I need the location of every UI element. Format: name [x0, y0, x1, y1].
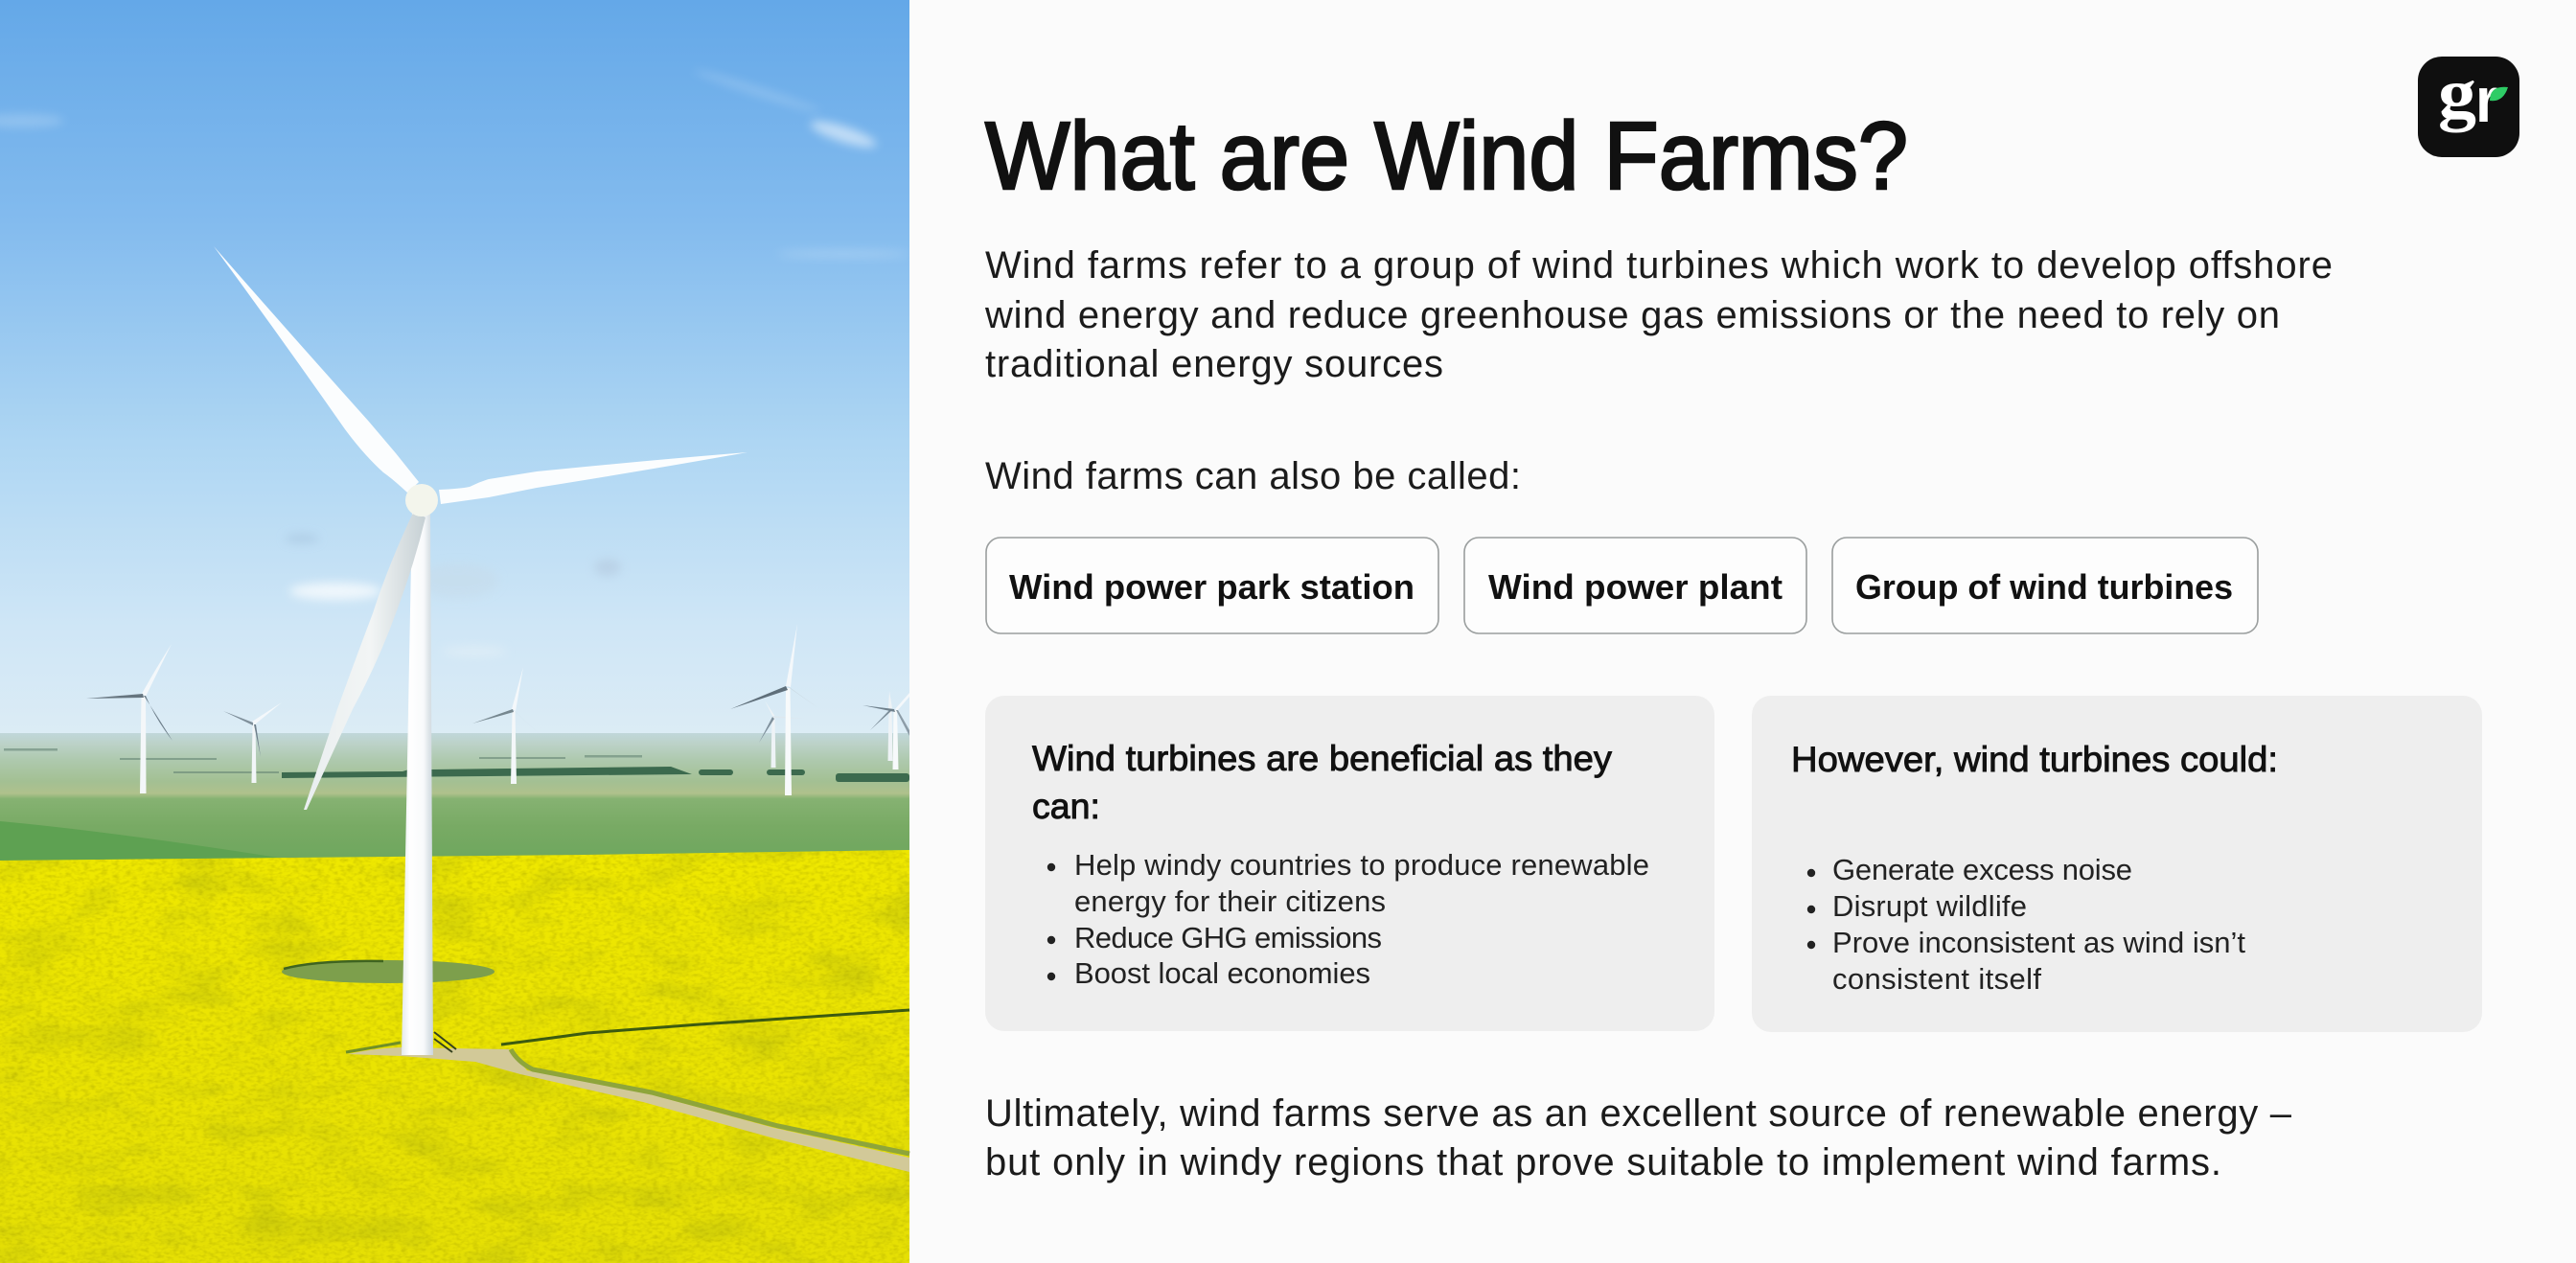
panel: drawbacks: [1752, 696, 2482, 1032]
subheading: also called: Wind farms can also be called:: [985, 455, 1521, 497]
intro paragraph: wind energy and reduce greenhouse gas emissions or the need to rely on: [984, 294, 2280, 336]
benefits heading: can:: [1032, 787, 1100, 826]
clouds: [0, 67, 910, 656]
closing paragraph: but only in windy regions that prove suitable to implement wind farms.: [985, 1141, 2221, 1183]
pad edge: [346, 1043, 401, 1052]
main tower: [402, 513, 433, 1055]
canola field: [0, 850, 909, 1263]
chip: wind power park station: Wind power park station: [1009, 567, 1414, 607]
title: What are Wind Farms?: [985, 103, 1908, 210]
benefits list: [1047, 848, 1649, 990]
small turbine 3: [472, 667, 542, 784]
photo: wind turbines in a canola field: [0, 0, 910, 1263]
intro paragraph: Wind farms refer to a group of wind turbines which work to develop offshore: [985, 244, 2333, 287]
distant field strips: [4, 748, 642, 773]
intro paragraph: [984, 244, 2333, 385]
small turbine 1: [86, 644, 172, 793]
small turbine 5: [759, 700, 804, 768]
logo: [2418, 55, 2519, 157]
panel: benefits: [985, 696, 1714, 1031]
benefits list: Reduce GHG emissions: [1074, 921, 1382, 954]
hub: [405, 484, 438, 517]
drawbacks list: Prove inconsistent as wind isn’t: [1832, 926, 2245, 959]
drawbacks list: [1807, 853, 2245, 996]
chip: wind power plant: [1464, 538, 1806, 633]
tower stairs: [434, 1032, 456, 1052]
small turbine 4: [730, 624, 818, 795]
small turbine 2: [223, 702, 282, 783]
chip: group of wind turbines: Group of wind turbines: [1855, 567, 2233, 607]
small turbine 7: [870, 691, 893, 761]
chip: wind power park station: [986, 538, 1438, 633]
darker green field patch: [0, 821, 297, 863]
sky: [0, 0, 909, 738]
blade: right: [439, 452, 748, 504]
closing paragraph: Ultimately, wind farms serve as an excellent source of renewable energy –: [985, 1092, 2292, 1135]
chip: group of wind turbines: [1832, 538, 2258, 633]
small turbine 6: [862, 693, 909, 769]
benefits list: energy for their citizens: [1074, 884, 1386, 918]
blade: lower: [304, 511, 426, 810]
access track: [348, 1047, 909, 1172]
drawbacks list: consistent itself: [1832, 962, 2041, 996]
drawbacks list: Disrupt wildlife: [1832, 889, 2027, 923]
logo letter r: r: [2475, 64, 2498, 135]
benefits heading: [1032, 739, 1613, 826]
tree line: [282, 767, 909, 782]
blade: upper left: [214, 246, 419, 493]
logo leaf: [2490, 87, 2508, 101]
canola texture: [0, 849, 909, 1263]
main turbine: [214, 246, 748, 1055]
benefits list: Boost local economies: [1074, 956, 1370, 990]
track shadow line: [501, 1010, 909, 1045]
green fields: [0, 733, 909, 867]
grass oval shadow edge: [284, 961, 383, 969]
closing paragraph: [985, 1092, 2292, 1183]
intro paragraph: traditional energy sources: [985, 343, 1443, 385]
grass oval: [282, 960, 494, 983]
logo letter g: g: [2438, 55, 2476, 133]
logo tile: [2418, 57, 2519, 157]
drawbacks list: Generate excess noise: [1832, 853, 2132, 886]
benefits list: Help windy countries to produce renewable: [1074, 848, 1649, 882]
benefits heading: Wind turbines are beneficial as they: [1032, 739, 1613, 778]
drawbacks heading: However, wind turbines could:: [1791, 740, 2278, 779]
track verge: [511, 1049, 909, 1154]
chip: wind power plant: Wind power plant: [1488, 567, 1782, 607]
